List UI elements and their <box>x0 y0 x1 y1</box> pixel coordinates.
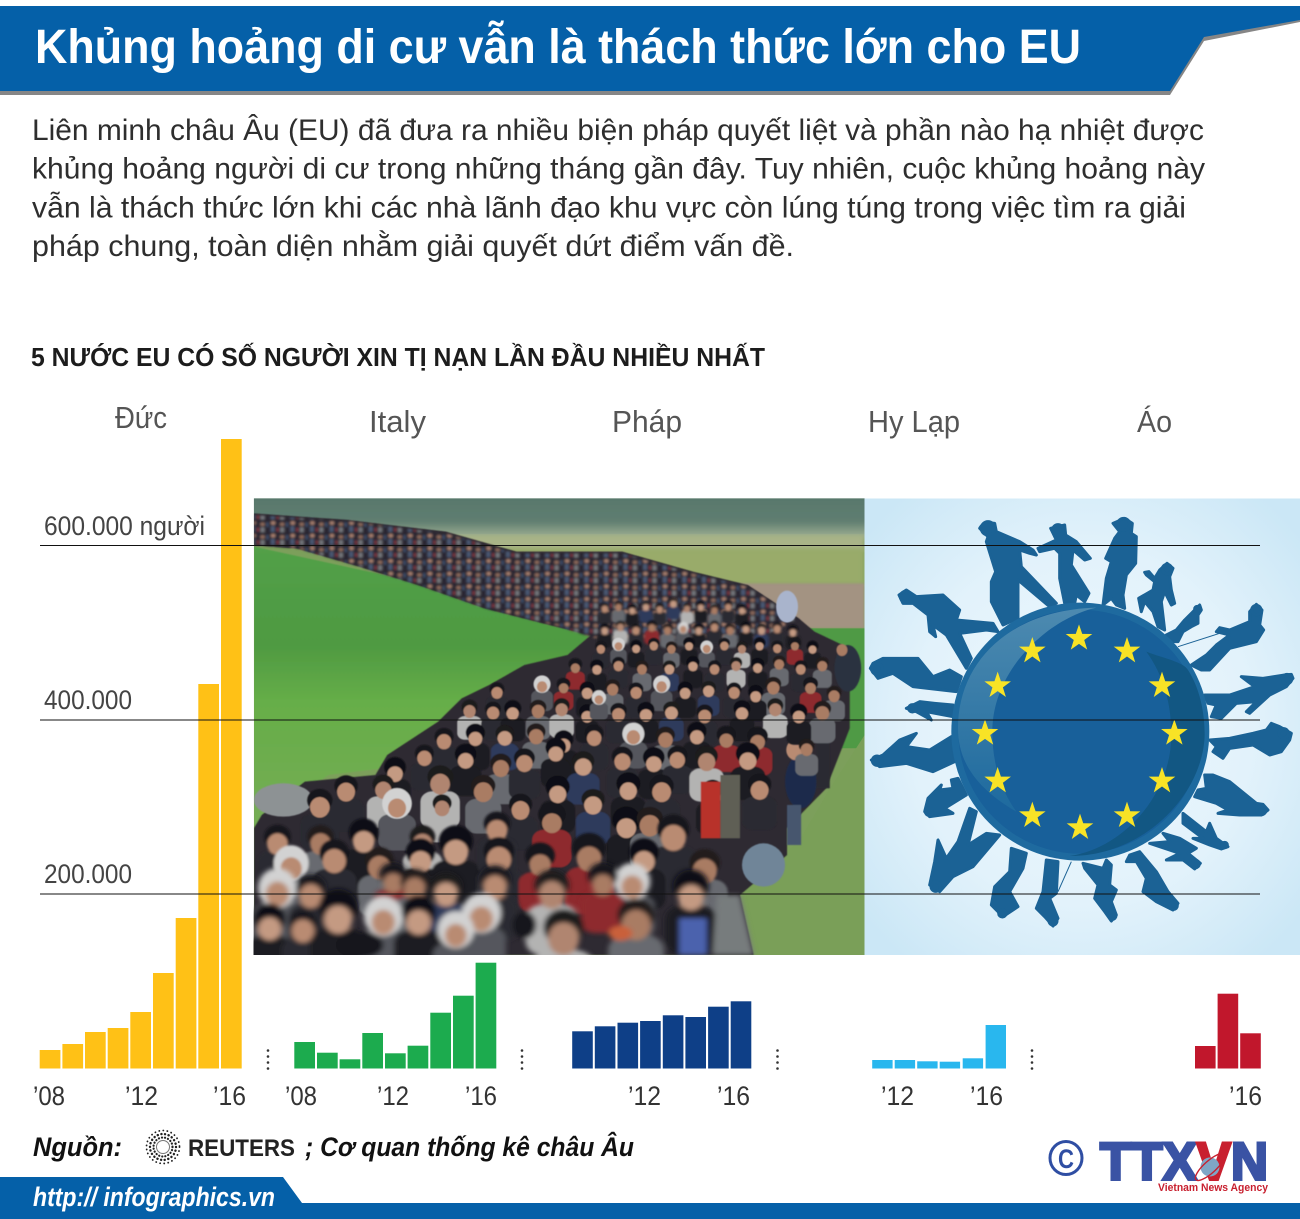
source line <box>33 1130 634 1164</box>
year axis labels: ’12 <box>628 1081 661 1111</box>
year axis labels: ’16 <box>213 1081 246 1111</box>
intro paragraph: khủng hoảng người di cư trong những tháng gần đây. Tuy nhiên, cuộc khủng hoảng này <box>32 152 1205 186</box>
migrant silhouettes <box>870 518 1293 926</box>
globe <box>951 603 1209 861</box>
year axis labels: ’08 <box>33 1081 65 1111</box>
bar chart: Italy <box>294 963 496 1068</box>
TTXVN logo: C <box>1058 1144 1074 1174</box>
country labels: Pháp <box>612 404 682 439</box>
bar chart: Austria <box>1195 994 1261 1068</box>
bar chart: France <box>572 1001 751 1068</box>
year axis labels <box>33 1081 1262 1111</box>
footer bar: http:// infographics.vn <box>33 1182 275 1212</box>
year axis labels: ’08 <box>285 1081 317 1111</box>
year axis labels: ’16 <box>1229 1081 1262 1111</box>
country labels: Áo <box>1137 404 1172 439</box>
photo: crowd of migrants <box>234 482 885 1010</box>
grid lines and value labels: 200.000 <box>44 859 132 889</box>
grid lines and value labels: 600.000 người <box>44 511 205 541</box>
year axis labels: ’12 <box>377 1081 409 1111</box>
country labels: Đức <box>115 400 167 435</box>
far and middle rows of heads <box>597 598 800 650</box>
bar chart: Greece <box>872 1025 1006 1068</box>
near rows of heads <box>258 812 728 924</box>
intro paragraph <box>32 114 1205 263</box>
EU stars <box>972 624 1188 839</box>
source line: ; Cơ quan thống kê châu Âu <box>305 1131 634 1162</box>
year axis labels: ’16 <box>970 1081 1003 1111</box>
year axis labels: ’16 <box>717 1081 750 1111</box>
dotted separators <box>267 1049 1033 1070</box>
TTXVN logo: Vietnam News Agency <box>1158 1182 1269 1194</box>
header banner <box>0 6 1300 95</box>
title: Khủng hoảng di cư vẫn là thách thức lớn cho EU <box>35 20 1081 74</box>
blanket, bag and child at the crowd edge <box>254 591 861 887</box>
illustration panel: EU globe with migrants <box>864 498 1300 955</box>
crowd mass <box>254 513 850 955</box>
year axis labels: ’16 <box>465 1081 497 1111</box>
grid lines and value labels <box>40 511 1260 894</box>
source line: Nguồn: <box>33 1132 122 1162</box>
TTXVN logo: TTXVN <box>1100 1132 1268 1192</box>
intro paragraph: vẫn là thách thức lớn khi các nhà lãnh đạo khu vực còn lúng túng trong việc tìm ra giải <box>32 192 1186 224</box>
chart heading: 5 NƯỚC EU CÓ SỐ NGƯỜI XIN TỊ NẠN LẦN ĐẦU NHIỀU NHẤT <box>31 342 765 372</box>
intro paragraph: pháp chung, toàn diện nhằm giải quyết dứt điểm vấn đề. <box>32 230 794 263</box>
grid lines and value labels: 400.000 <box>44 685 132 715</box>
country labels <box>115 400 1172 439</box>
source line: REUTERS <box>188 1135 295 1162</box>
country labels: Italy <box>369 404 426 439</box>
year axis labels: ’12 <box>125 1081 158 1111</box>
intro paragraph: Liên minh châu Âu (EU) đã đưa ra nhiều biện pháp quyết liệt và phần nào hạ nhiệt được <box>32 114 1204 147</box>
country labels: Hy Lạp <box>868 404 960 439</box>
bar chart: Germany <box>40 439 242 1068</box>
icon: Reuters dotted logo <box>146 1130 180 1164</box>
footer bar <box>0 1177 1300 1219</box>
year axis labels: ’12 <box>881 1081 914 1111</box>
